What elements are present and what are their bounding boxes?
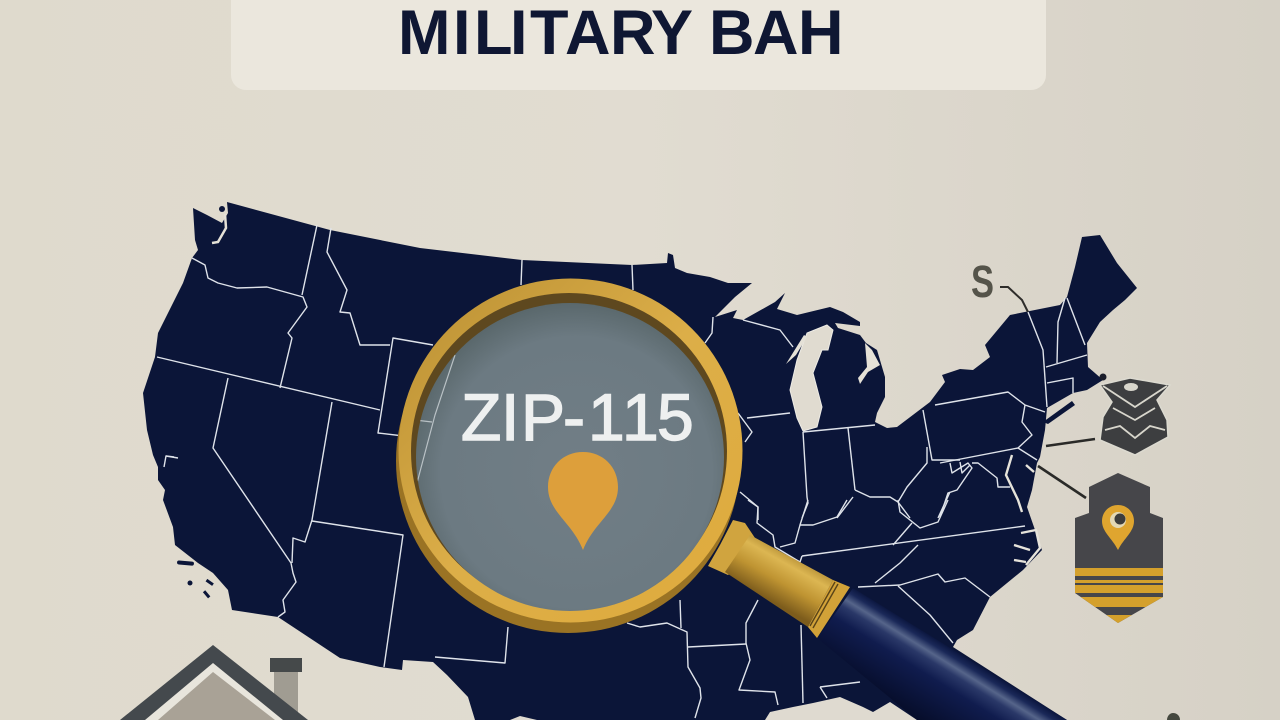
Pacific islands	[177, 206, 225, 598]
roof	[120, 645, 308, 720]
title: MILITARY BAH	[398, 0, 844, 68]
icon: letter S with callout: S	[971, 256, 994, 307]
icon: rank badge with callout	[1046, 374, 1170, 455]
lens text: ZIP-115: ZIP-115	[461, 380, 694, 454]
handle: gold band	[808, 580, 850, 638]
title panel	[231, 0, 1046, 90]
state border lines	[157, 225, 1087, 718]
ring inner shadow	[411, 293, 727, 609]
wall	[158, 672, 275, 720]
icon: partial dark element at bottom edge	[1167, 713, 1180, 720]
lens	[416, 303, 724, 611]
Long Island	[1043, 401, 1075, 424]
Lake Michigan	[790, 325, 833, 431]
Gulf of Mexico	[510, 697, 917, 720]
Saginaw Bay and Lake Huron	[858, 343, 880, 384]
gold ring	[398, 278, 742, 622]
Chesapeake Bay and Outer Banks	[1006, 455, 1040, 565]
Green Bay	[786, 335, 807, 364]
Puget Sound	[212, 214, 226, 243]
roof trim	[145, 663, 283, 720]
epaulette gold stripes	[1075, 568, 1163, 623]
ring shadow	[396, 289, 740, 633]
handle: navy grip	[818, 588, 1067, 720]
icon: epaulette with callout	[1038, 466, 1170, 625]
icon: house	[120, 645, 308, 720]
lens: location pin	[548, 452, 618, 550]
epaulette pin	[1102, 505, 1134, 550]
icon: letter S with callout	[971, 256, 1028, 312]
magnifying glass	[396, 278, 1067, 720]
chimney	[274, 670, 298, 720]
US map	[143, 202, 1137, 720]
handle: gold tube	[725, 535, 833, 627]
lens: faint map lines	[415, 355, 455, 483]
map landmass	[143, 202, 1137, 720]
handle: gold collar	[708, 520, 755, 575]
